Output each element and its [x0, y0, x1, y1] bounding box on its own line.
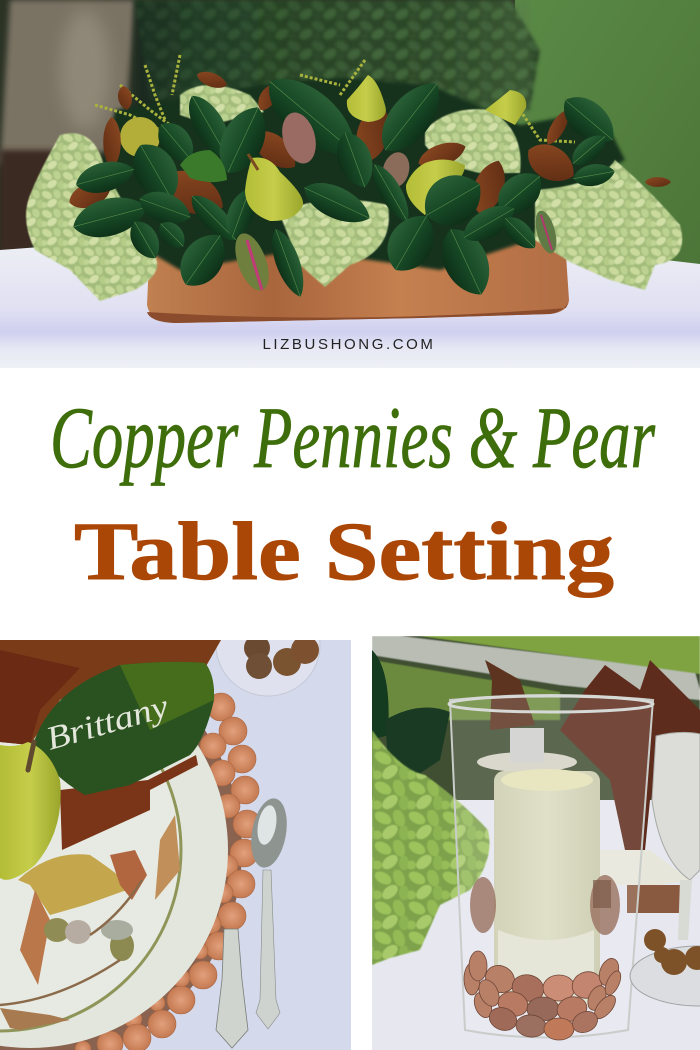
website credit: LIZBUSHONG.COM	[262, 336, 436, 353]
napkin fold	[0, 650, 80, 745]
hydrangea	[372, 730, 490, 965]
green magnolia leaves	[73, 79, 615, 258]
background leaves	[372, 650, 450, 780]
copper planter	[147, 240, 569, 323]
plate motif: yellow oak leaf	[18, 854, 132, 915]
background napkins	[485, 660, 700, 850]
pillar candle	[494, 769, 600, 1006]
spoon	[251, 798, 287, 1030]
plate motif: branches	[0, 880, 142, 1005]
magnolia seed cones	[282, 112, 410, 186]
garden background	[0, 0, 700, 264]
charger backing	[0, 638, 242, 1050]
botanical dinner plate	[0, 768, 182, 1032]
wine glass	[630, 732, 700, 1006]
name card leaf	[33, 662, 214, 795]
hydrangea clusters	[26, 85, 682, 301]
knife handle	[216, 929, 248, 1048]
background plate	[477, 728, 690, 913]
plate motif: bottom leaf	[0, 1008, 70, 1030]
pear: front right	[406, 159, 465, 215]
white embossed plate	[0, 744, 228, 1048]
lawn and driveway backdrop	[372, 636, 700, 836]
pennies on glass front	[464, 951, 624, 1040]
linen background	[122, 640, 351, 1050]
light green leaf	[180, 150, 227, 182]
pennies on glass back	[470, 875, 620, 935]
penny ring	[75, 693, 261, 1050]
pear: top center	[347, 75, 386, 122]
dark foliage mass	[80, 78, 625, 270]
pear	[0, 742, 61, 880]
lower napkin	[60, 755, 198, 850]
handwritten name: Brittany	[42, 689, 173, 758]
pear: top right	[485, 90, 526, 125]
upper napkin and leaves	[0, 640, 221, 745]
plate motif: orange oak leaf	[110, 850, 147, 900]
photo: penny hurricane candle holder	[372, 636, 700, 1050]
glass hurricane	[449, 695, 653, 1038]
acorn dish	[216, 640, 320, 696]
plate motif: lower left leaf	[20, 890, 50, 985]
front leaves	[180, 164, 536, 297]
plate motif: right leaf	[155, 815, 180, 900]
white tablecloth	[0, 239, 700, 368]
goldenrod sprigs	[95, 55, 575, 142]
title: serif line: Table Setting	[74, 505, 614, 597]
brown magnolia leaves	[65, 68, 671, 225]
plate motif: acorns	[44, 918, 134, 961]
pokeberry sprays	[229, 208, 560, 295]
tablecloth	[372, 800, 700, 1050]
photo: place setting with penny charger	[0, 640, 351, 1050]
photo: copper box floral centerpiece	[0, 0, 700, 368]
pear: front left	[245, 154, 303, 221]
pear: back left	[120, 117, 160, 157]
gumball cluster	[644, 929, 700, 975]
